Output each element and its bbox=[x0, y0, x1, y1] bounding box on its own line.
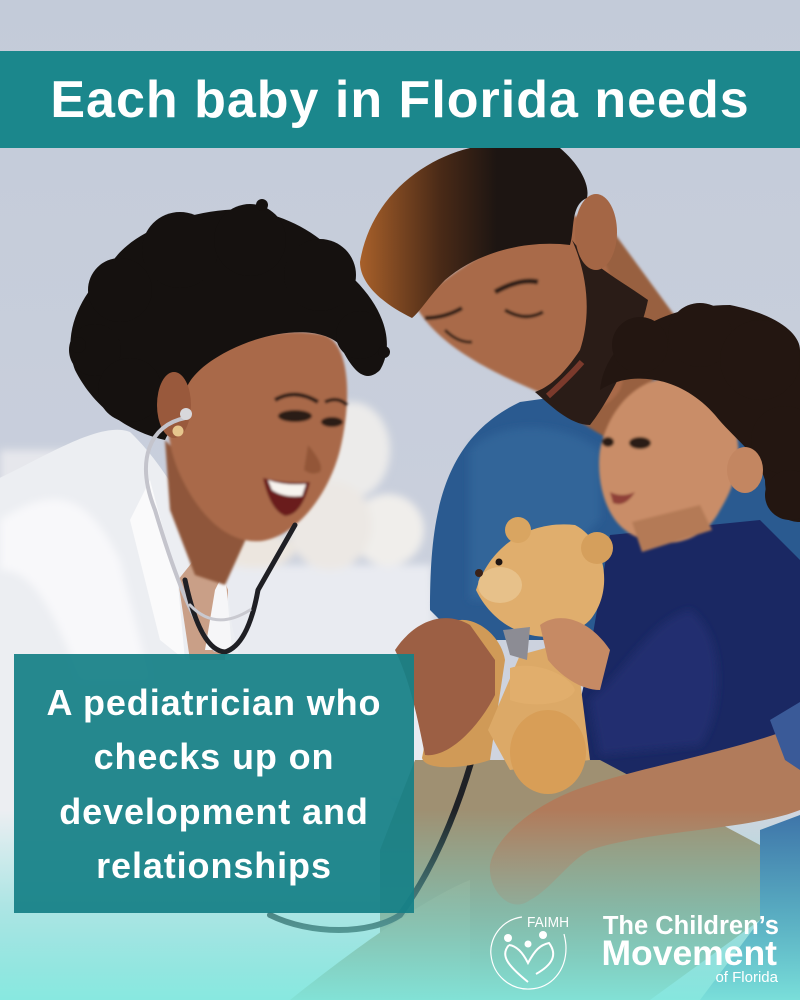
pediatrician's hand bbox=[395, 618, 495, 755]
title banner bbox=[0, 51, 800, 148]
logo: The Children's Movement of Florida: Movement bbox=[601, 933, 777, 973]
pediatrician's curly hair bbox=[69, 199, 390, 440]
stethoscope bbox=[146, 418, 480, 930]
father's face and neck bbox=[415, 200, 690, 440]
father's denim shirt bbox=[430, 305, 800, 640]
teddy bear bbox=[422, 517, 613, 794]
callout panel bbox=[14, 654, 414, 913]
father's arm and hand around toddler bbox=[490, 725, 800, 905]
logo: FAIMH bbox=[490, 914, 569, 990]
toddler's face and ear bbox=[599, 376, 738, 552]
logo: The Children's Movement of Florida: of Florida bbox=[715, 969, 778, 986]
father's smile bbox=[548, 362, 582, 396]
father's hair bbox=[360, 148, 588, 318]
toddler's sweater bbox=[560, 520, 800, 790]
father's beard bbox=[535, 240, 648, 425]
toddler's trousers and father's jeans bbox=[290, 760, 800, 1000]
callout text: A pediatrician who bbox=[47, 682, 381, 723]
toddler's ear bbox=[727, 447, 763, 493]
striped shirt cuff bbox=[770, 702, 800, 770]
callout text bbox=[47, 682, 381, 886]
bed and soft toy in background bbox=[0, 402, 440, 800]
pediatrician's neck and face bbox=[165, 332, 347, 585]
father's ear bbox=[575, 194, 617, 270]
title: Each baby in Florida needs bbox=[50, 70, 750, 128]
pediatrician's ear and earring bbox=[157, 372, 191, 438]
toddler's hand bbox=[540, 618, 610, 690]
stethoscope chest piece on teddy bbox=[503, 627, 530, 660]
callout text: checks up on bbox=[94, 736, 334, 777]
toddler's curly hair bbox=[600, 303, 800, 522]
callout text: development and bbox=[59, 791, 369, 832]
logo: The Children's Movement of Florida: The Children’s bbox=[603, 912, 779, 940]
logo: The Children's Movement of Florida bbox=[601, 912, 779, 986]
pediatrician's white coat bbox=[0, 430, 425, 1000]
bottom teal fade bbox=[0, 810, 800, 1000]
callout text: relationships bbox=[96, 845, 332, 886]
logo: FAIMH: FAIMH bbox=[527, 914, 569, 931]
